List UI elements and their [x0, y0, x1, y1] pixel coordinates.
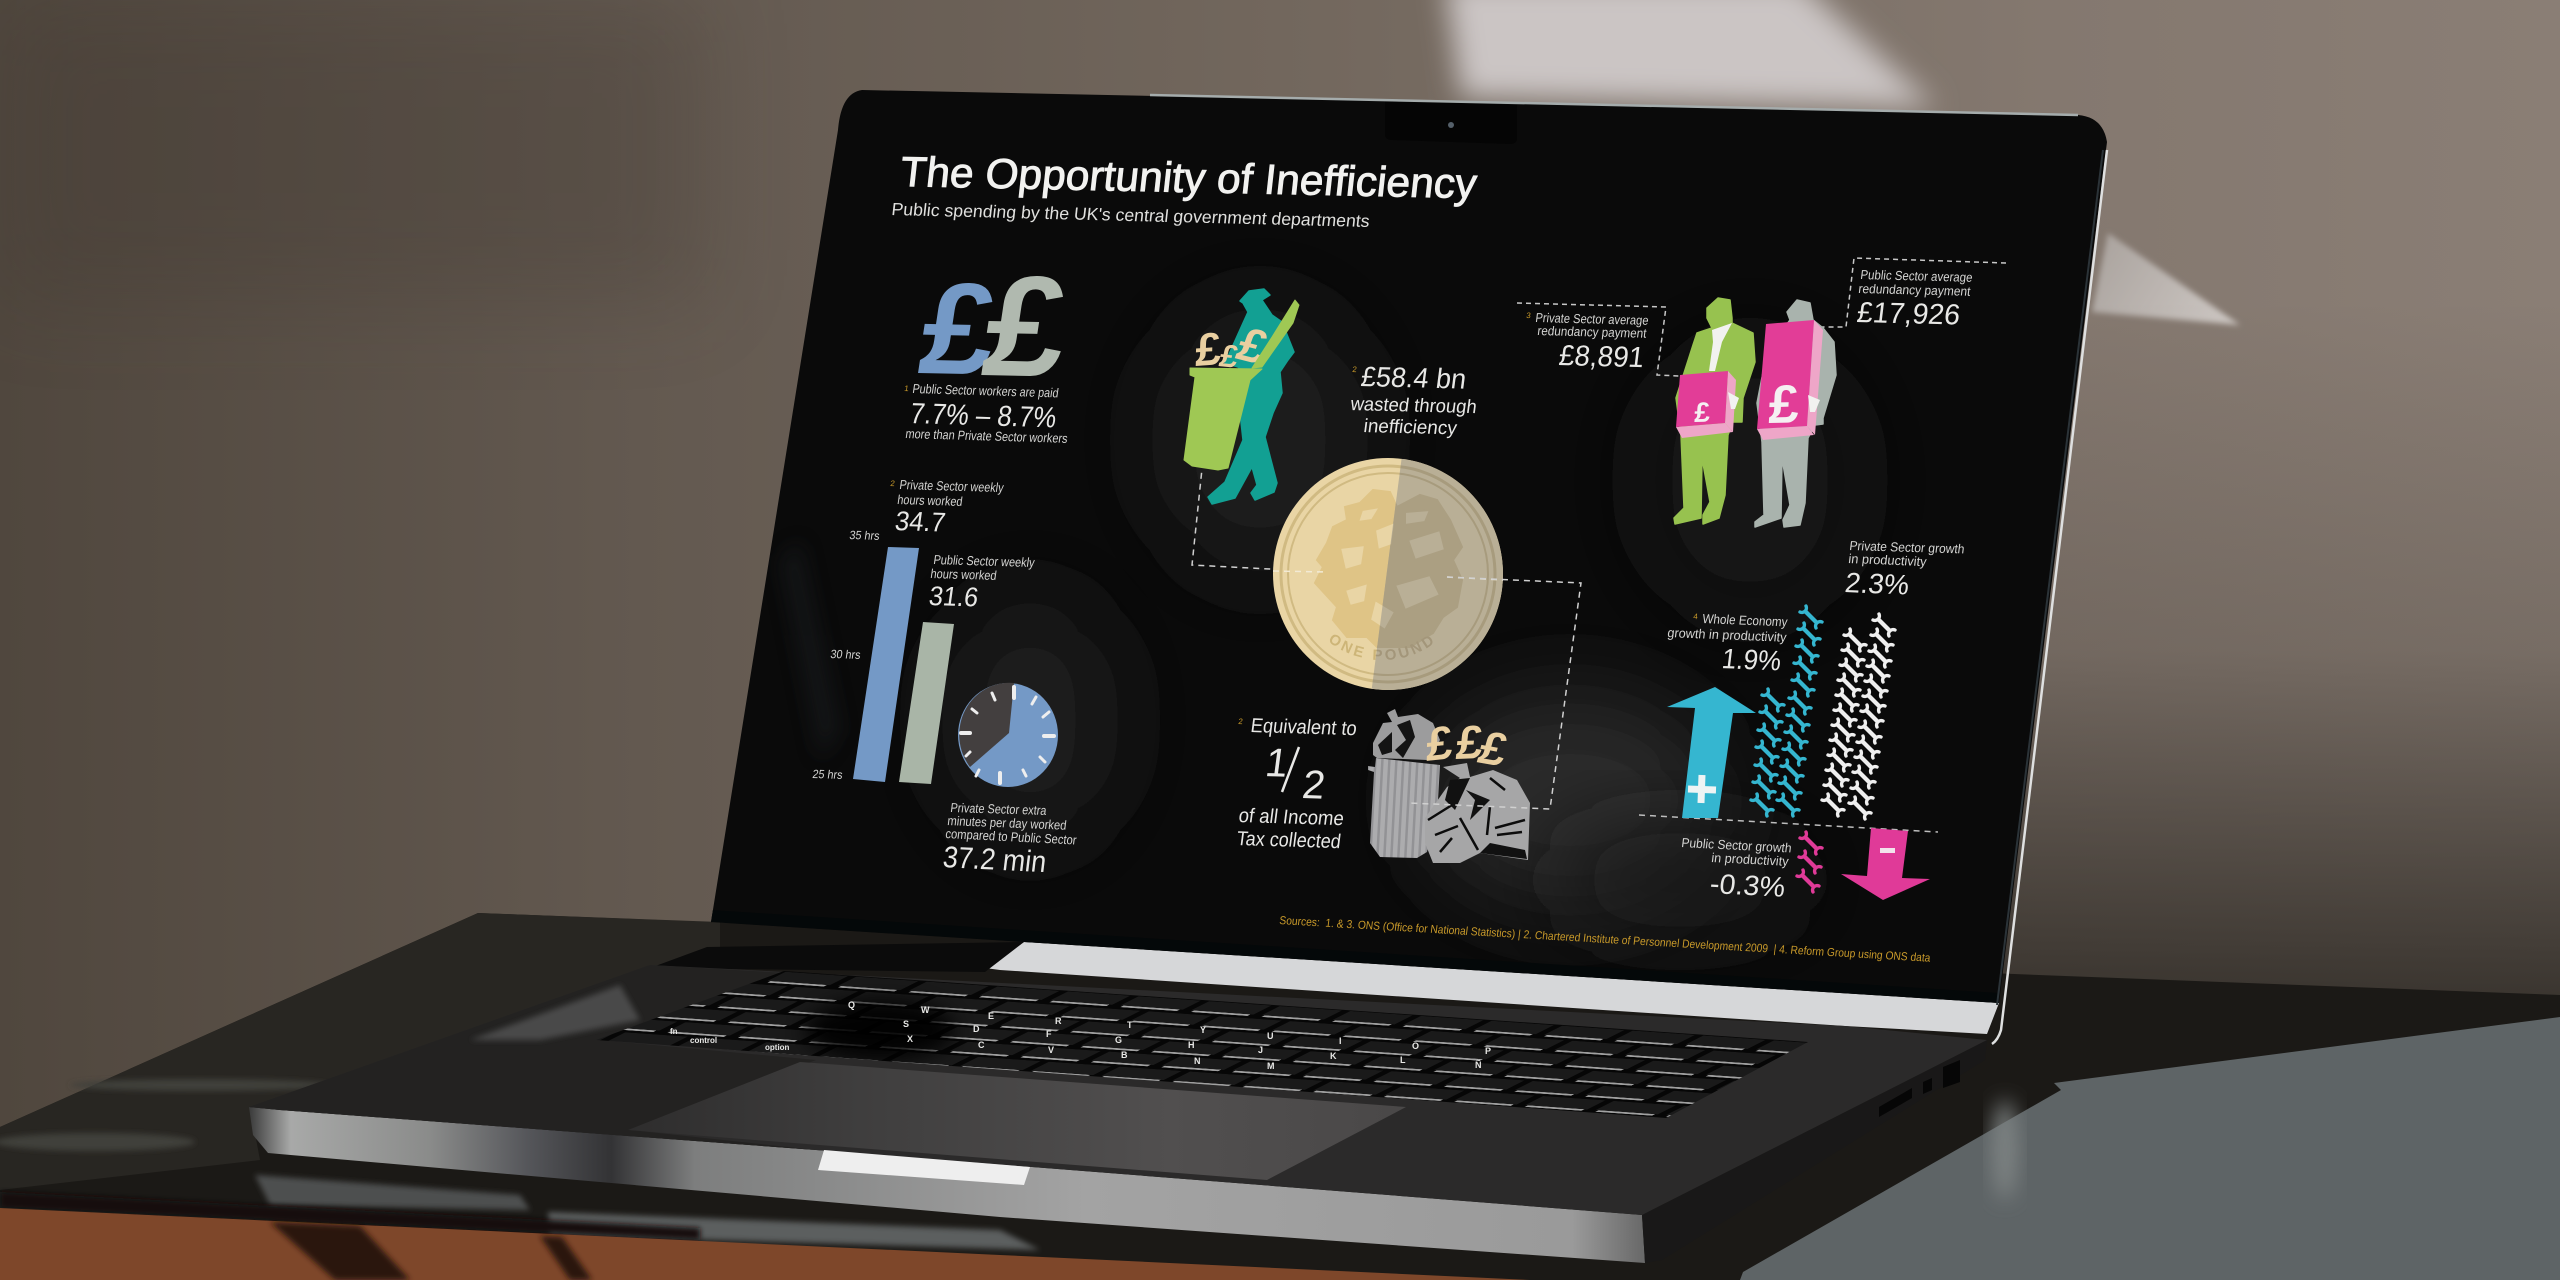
public productivity label: -0.3% — [1708, 868, 1787, 903]
pay caption lower: more than Private Sector workers — [905, 426, 1069, 446]
dashed connector private — [1517, 303, 1679, 376]
icon: bin and rubbish bags: £ — [1473, 721, 1514, 776]
icon: green man with small box — [1674, 298, 1755, 524]
whole economy label: Whole Economy — [1702, 611, 1789, 629]
private productivity label: Private Sector growth — [1849, 538, 1965, 556]
private productivity label: in productivity — [1848, 551, 1928, 569]
icon: bin and rubbish bags: £ — [1426, 716, 1453, 772]
note number: 2 — [890, 479, 896, 488]
hinge shadow — [650, 942, 1024, 972]
icon: blue pound: £ — [912, 256, 1006, 402]
panel: waste centre — [1184, 288, 1582, 863]
icon: man with bin: £ — [1195, 322, 1222, 376]
equivalent text: 2 — [1238, 717, 1244, 726]
public productivity label — [1681, 835, 1792, 903]
camera lens — [1448, 122, 1454, 128]
equivalent text — [1235, 715, 1358, 853]
whole economy label: 1.9% — [1720, 643, 1783, 676]
public redundancy label: Public Sector average — [1860, 267, 1973, 285]
keyboard: X — [907, 1034, 913, 1044]
camera notch — [1385, 100, 1517, 144]
keyboard: F — [1046, 1029, 1052, 1039]
keyboard deck — [249, 965, 1987, 1215]
minutes label: minutes per day worked — [947, 813, 1067, 833]
bar: private sector — [853, 547, 919, 782]
keyboard: Ñ — [1475, 1060, 1482, 1070]
background: table — [0, 913, 2560, 1280]
icon: man with bin — [1184, 289, 1299, 504]
wrenches: teal tall column — [1777, 606, 1822, 816]
panel: hours worked — [812, 477, 1078, 879]
icon: green man with small box: £ — [1694, 397, 1711, 428]
keyboard: O — [1412, 1041, 1419, 1051]
keyboard: N — [1194, 1056, 1200, 1066]
whole economy label: 4 — [1693, 612, 1699, 621]
icon: one pound coin — [1273, 458, 1503, 690]
icon: man with bin: £ — [1230, 317, 1275, 375]
laptop base — [249, 942, 1999, 1263]
public redundancy label: £17,926 — [1855, 297, 1962, 332]
private hours label: Private Sector weekly — [899, 477, 1005, 495]
wrenches: pink column — [1797, 832, 1822, 892]
hinge band — [985, 942, 1999, 1034]
equivalent text: of all Income — [1237, 805, 1345, 830]
public productivity label: Public Sector growth — [1681, 835, 1792, 855]
keyboard: I — [1339, 1036, 1342, 1046]
private hours label: hours worked — [896, 492, 964, 509]
wrenches: white left column — [1822, 629, 1866, 816]
note number: 1 — [904, 384, 910, 393]
private hours label — [896, 477, 1005, 510]
keyboard: H — [1188, 1040, 1194, 1050]
private redundancy label: redundancy payment — [1537, 323, 1648, 341]
pay caption: Public Sector workers are paid — [912, 381, 1060, 400]
keyboard: control — [690, 1036, 717, 1045]
panel: productivity — [1639, 538, 1965, 903]
keyboard: M — [1267, 1061, 1274, 1071]
waste figure: 2 — [1352, 365, 1358, 374]
icon: bin and rubbish bags — [1368, 709, 1530, 863]
keyboard: option — [765, 1043, 790, 1052]
public redundancy label — [1855, 267, 1973, 332]
public redundancy label: redundancy payment — [1858, 281, 1972, 299]
keyboard: U — [1267, 1031, 1274, 1041]
keyboard: B — [1121, 1050, 1128, 1060]
keyboard: fn — [670, 1027, 678, 1036]
public hours label — [930, 552, 1036, 584]
public productivity label: in productivity — [1711, 850, 1790, 869]
private productivity label — [1843, 538, 1965, 601]
bar: public sector — [899, 622, 954, 784]
public hours label: hours worked — [930, 566, 998, 583]
public hours value: 31.6 — [927, 580, 980, 612]
keyboard: P — [1485, 1046, 1491, 1056]
minutes label: Private Sector extra — [950, 800, 1048, 818]
laptop front face — [249, 1107, 1645, 1263]
keyboard: D — [973, 1024, 980, 1034]
keyboard: Q — [848, 1000, 855, 1010]
waste figure: wasted through — [1348, 394, 1478, 418]
icon: grey man with large box: £ — [1767, 374, 1800, 435]
keyboard: E — [988, 1011, 994, 1021]
equivalent text: Tax collected — [1235, 828, 1342, 853]
trackpad — [628, 1062, 1406, 1180]
waste figure — [1348, 361, 1478, 439]
private redundancy label: 3 — [1526, 311, 1532, 320]
minutes value: 37.2 min — [941, 841, 1048, 879]
dashed connector right — [1409, 577, 1581, 809]
keyboard: G — [1115, 1035, 1122, 1045]
notch highlight — [818, 1150, 1030, 1185]
title: The Opportunity of Inefficiency — [898, 148, 1479, 207]
keyboard: J — [1258, 1045, 1263, 1055]
waste figure: inefficiency — [1362, 416, 1459, 439]
panel: redundancy — [1517, 258, 2006, 527]
arrow: down — [1841, 828, 1930, 900]
minutes label — [945, 800, 1078, 848]
keyboard: S — [903, 1019, 909, 1029]
axis label 30: 30 hrs — [830, 647, 862, 662]
axis label 35: 35 hrs — [849, 528, 881, 543]
sources: Sources: 1. & 3. ONS (Office for National Statistics) | 2. Chartered Institute of Personnel Development 2009 | 4. Reform Group using ONS data — [1279, 915, 1932, 965]
dashed connector left — [1192, 440, 1327, 572]
wrenches: white right column — [1849, 614, 1895, 819]
private productivity label: 2.3% — [1843, 567, 1911, 601]
icon: grey man with large box — [1755, 300, 1836, 527]
icon: one pound coin: ONE POUND — [1330, 634, 1377, 660]
arrow: up — [1667, 687, 1756, 818]
private redundancy label — [1526, 310, 1649, 374]
keyboard: R — [1055, 1016, 1062, 1026]
icon: clock — [958, 683, 1058, 787]
keyboard: C — [978, 1040, 985, 1050]
waste figure: £58.4 bn — [1359, 361, 1468, 395]
whole economy label: growth in productivity — [1667, 625, 1788, 645]
wooden table edge — [0, 1208, 1530, 1280]
keyboard: Y — [1200, 1025, 1206, 1035]
public hours label: Public Sector weekly — [933, 552, 1036, 570]
dashed connector public — [1822, 258, 2006, 327]
equivalent text: 2 — [1300, 762, 1328, 808]
equivalent text: 1 — [1263, 740, 1291, 786]
whole economy label — [1667, 611, 1789, 676]
private redundancy label: Private Sector average — [1535, 310, 1649, 328]
laptop screen — [707, 90, 2107, 1044]
equivalent text: Equivalent to — [1249, 715, 1358, 740]
minutes label: compared to Public Sector — [945, 826, 1078, 848]
icon: bin and rubbish bags: £ — [1454, 716, 1486, 770]
keyboard: L — [1400, 1055, 1406, 1065]
keyboard: V — [1048, 1045, 1054, 1055]
keyboard: T — [1127, 1020, 1133, 1030]
icon: one pound coin: ONE POUND — [1376, 636, 1432, 660]
pay figure: 7.7% – 8.7% — [908, 398, 1058, 434]
laptop side — [1642, 1040, 1987, 1263]
private hours value: 34.7 — [893, 505, 947, 537]
ports — [1879, 1088, 1912, 1117]
keyboard — [590, 965, 1820, 1125]
keyboard: W — [921, 1005, 930, 1015]
icon: grey pound: £ — [974, 247, 1078, 407]
private redundancy label: £8,891 — [1557, 340, 1646, 374]
baseline — [1639, 815, 1938, 832]
deck shadow — [249, 965, 820, 1150]
panel: pay comparison — [904, 247, 1078, 446]
icon: man with bin: £ — [1217, 338, 1242, 375]
axis label 25: 25 hrs — [812, 767, 844, 782]
keyboard: K — [1330, 1051, 1337, 1061]
wrenches: teal short column — [1751, 689, 1784, 816]
subtitle: Public spending by the UK's central government departments — [891, 199, 1371, 231]
screen panel — [707, 90, 2107, 1003]
